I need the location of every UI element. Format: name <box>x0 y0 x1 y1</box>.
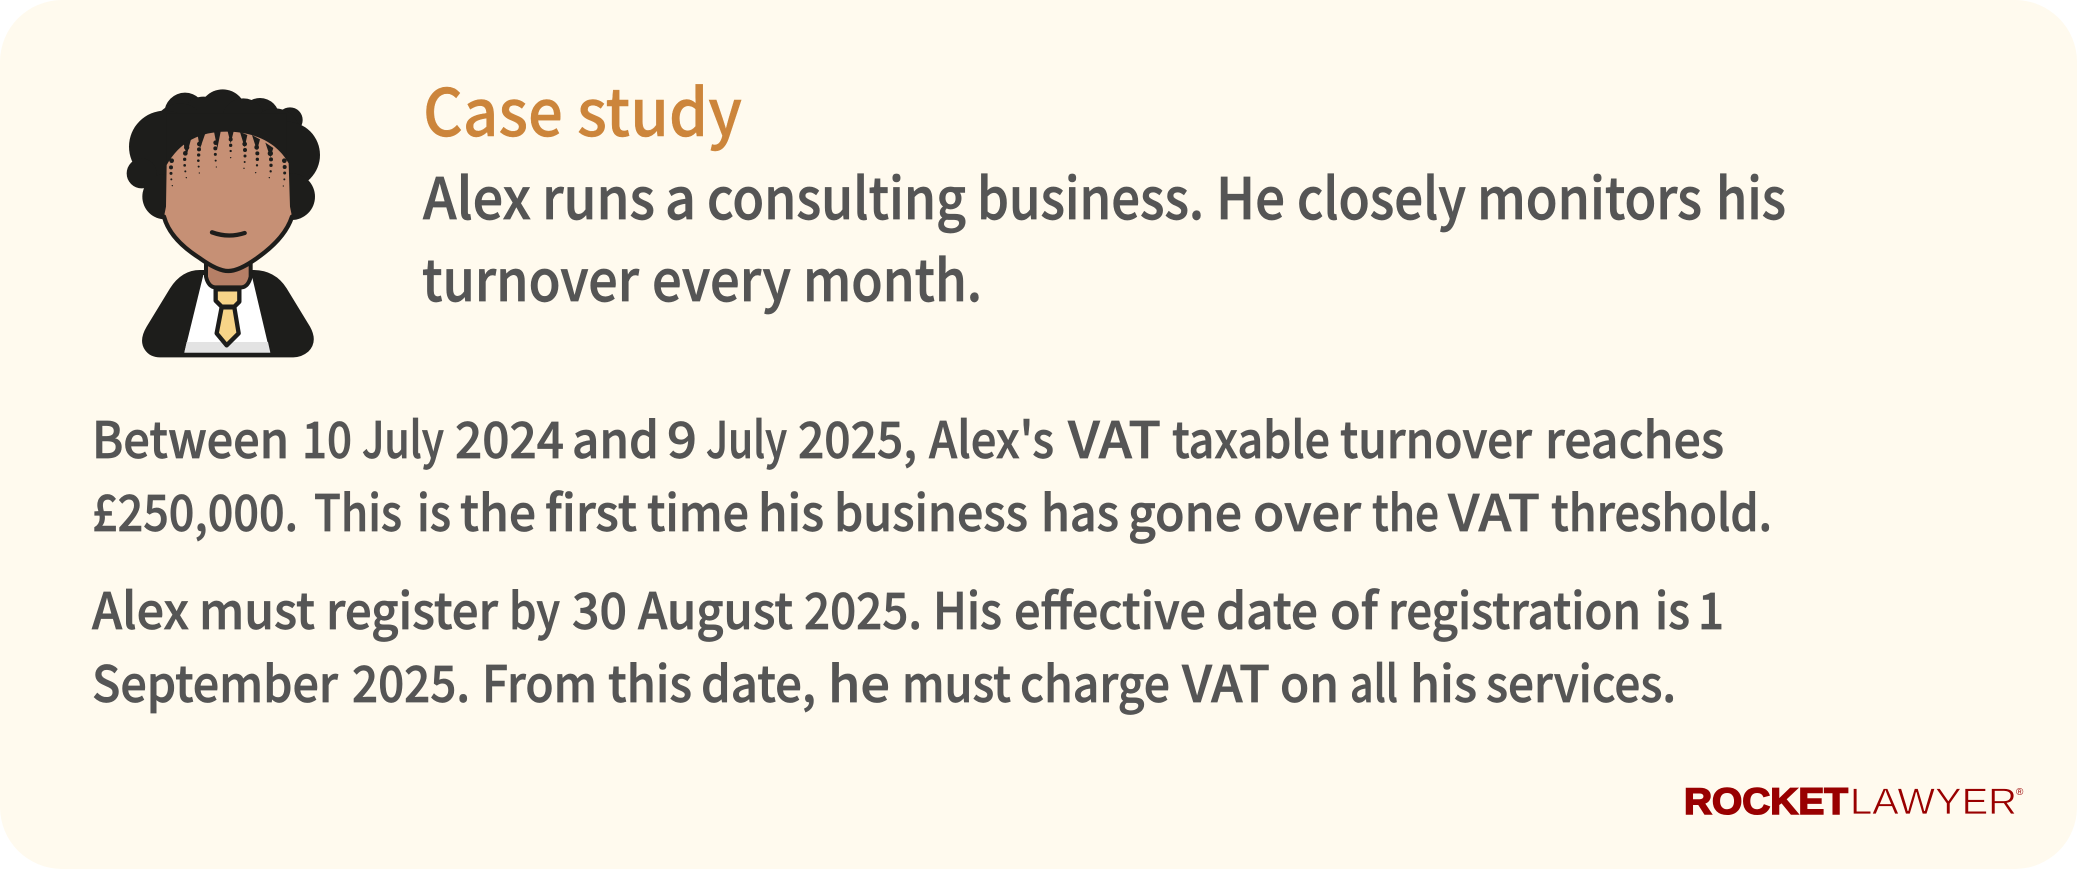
paragraph: registration <box>92 572 1724 717</box>
paragraph: registration: by <box>509 572 560 644</box>
paragraph: turnover: taxable <box>1172 401 1330 473</box>
tie <box>216 289 239 307</box>
intro text: consulting <box>707 154 966 236</box>
paragraph: registration: August <box>638 572 793 644</box>
paragraph: turnover: 2025, <box>798 401 917 473</box>
paragraph: registration: on <box>1280 645 1339 717</box>
heading: study <box>577 61 742 155</box>
neck <box>206 260 251 287</box>
paragraph: turnover: the <box>1372 474 1439 546</box>
logo: Rocket Lawyer <box>1684 781 2024 822</box>
heading: Case <box>423 61 563 155</box>
paragraph: registration: is <box>1655 572 1690 644</box>
paragraph: turnover: 9 <box>667 401 697 473</box>
fringe <box>169 130 287 187</box>
logo: Rocket Lawyer: LAWYER <box>1850 781 2017 822</box>
intro text: a <box>665 154 696 236</box>
intro text: monitors <box>1477 154 1702 236</box>
paragraph: registration: his <box>1410 645 1477 717</box>
paragraph: registration: this <box>608 645 692 717</box>
paragraph: turnover: This <box>314 474 402 546</box>
paragraph: turnover: £250,000. <box>92 474 298 546</box>
paragraph: registration: date, <box>701 645 816 717</box>
icon: Alex avatar <box>127 89 320 357</box>
paragraph: registration: VAT <box>1181 645 1270 717</box>
paragraph: turnover: the <box>460 474 536 546</box>
intro text: every <box>652 236 791 318</box>
paragraph: registration: register <box>326 572 499 644</box>
paragraph: turnover: VAT <box>1447 474 1540 546</box>
paragraph: turnover: gone <box>1128 474 1242 546</box>
paragraph: turnover: July <box>706 401 787 473</box>
paragraph: registration: 2025. <box>352 645 470 717</box>
intro text: business. <box>977 154 1204 236</box>
paragraph: turnover: threshold. <box>1551 474 1772 546</box>
face <box>164 132 292 271</box>
paragraph: turnover: 2024 <box>455 401 564 473</box>
paragraph: registration: must <box>902 645 1011 717</box>
intro text: He <box>1216 154 1285 236</box>
paragraph: registration: all <box>1350 645 1398 717</box>
hair <box>127 89 320 220</box>
paragraph: registration: Alex <box>92 572 189 644</box>
mouth <box>212 232 245 236</box>
paragraph: turnover: 10 <box>302 401 352 473</box>
paragraph: turnover: Alex's <box>929 401 1054 473</box>
intro text: Alex <box>423 154 531 236</box>
intro text <box>422 154 1786 318</box>
paragraph: turnover: business <box>834 474 1028 546</box>
paragraph: registration: September <box>92 645 339 717</box>
heading <box>423 61 742 155</box>
paragraph: turnover: reaches <box>1545 401 1724 473</box>
paragraph: registration: effective <box>1014 572 1206 644</box>
paragraph: registration: must <box>199 572 315 644</box>
paragraph: registration: services. <box>1486 645 1676 717</box>
paragraph: turnover: July <box>362 401 444 473</box>
paragraph: turnover: has <box>1041 474 1119 546</box>
intro text: runs <box>542 154 655 236</box>
paragraph: turnover: is <box>417 474 451 546</box>
paragraph: registration: charge <box>1020 645 1170 717</box>
intro text: month. <box>803 236 982 318</box>
paragraph: registration: he <box>828 645 890 717</box>
logo: Rocket Lawyer: ® <box>2016 787 2024 798</box>
shirt <box>184 275 270 353</box>
paragraph: registration: 30 <box>572 572 627 644</box>
paragraph: turnover: over <box>1253 474 1362 546</box>
paragraph: turnover: turnover <box>1340 401 1532 473</box>
paragraph: registration: registration <box>1388 572 1641 644</box>
paragraph: turnover <box>92 401 1772 546</box>
paragraph: turnover: time <box>647 474 749 546</box>
intro text: turnover <box>422 236 640 318</box>
logo: Rocket Lawyer: ROCKET <box>1684 781 1848 822</box>
paragraph: registration: of <box>1330 572 1380 644</box>
paragraph: turnover: first <box>545 474 637 546</box>
intro text: closely <box>1297 154 1466 236</box>
paragraph: turnover: VAT <box>1067 401 1161 473</box>
paragraph: registration: date <box>1216 572 1318 644</box>
intro text: his <box>1716 154 1786 236</box>
paragraph: registration: 2025. <box>804 572 922 644</box>
paragraph: registration: 1 <box>1698 572 1724 644</box>
jacket <box>142 270 314 357</box>
paragraph: registration: From <box>482 645 597 717</box>
paragraph: turnover: Between <box>92 401 289 473</box>
paragraph: registration: His <box>933 572 1002 644</box>
paragraph: turnover: and <box>572 401 659 473</box>
paragraph: turnover: his <box>758 474 824 546</box>
